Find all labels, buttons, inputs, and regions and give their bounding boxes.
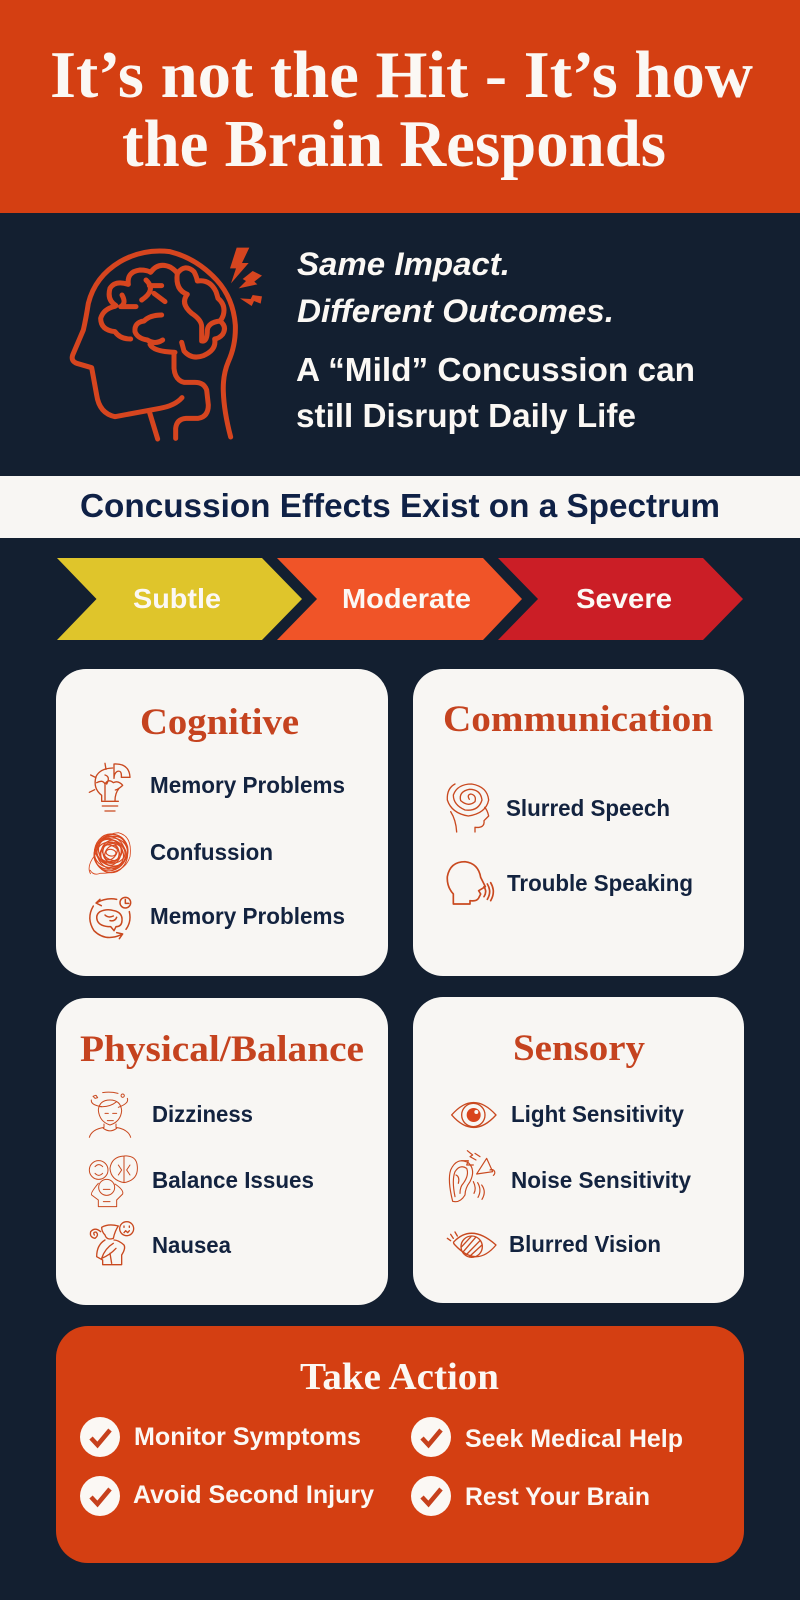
icon: brain with cycle arrows and clock [90, 897, 131, 939]
tagline line 2: Different Outcomes. [297, 293, 614, 329]
panel: communication [413, 669, 744, 976]
action: rest your brain [411, 1476, 650, 1516]
action: avoid second injury: Avoid Second Injury [133, 1481, 374, 1509]
spectrum arrow: moderate [277, 558, 522, 640]
action: rest your brain: Rest Your Brain [465, 1483, 650, 1511]
item: blurred vision: Blurred Vision [509, 1231, 661, 1257]
icon: speaking head with sound waves [447, 862, 493, 904]
spectrum arrow: subtle [57, 558, 302, 640]
panel: physical and balance [56, 998, 388, 1305]
icon: spinning head and brain [89, 1156, 137, 1207]
action: monitor symptoms: Monitor Symptoms [134, 1423, 361, 1451]
icon: head with spiral [447, 784, 489, 832]
title line 2: the Brain Responds [122, 107, 666, 181]
icon: nauseous person [90, 1222, 134, 1265]
panel: sensory [413, 997, 744, 1303]
physical balance heading: Physical/Balance [80, 1029, 364, 1070]
action: seek medical help [411, 1417, 683, 1457]
item: light sensitivity: Light Sensitivity [511, 1101, 684, 1127]
item: nausea: Nausea [152, 1232, 232, 1258]
item: dizziness: Dizziness [152, 1101, 253, 1127]
action: avoid second injury [80, 1476, 374, 1516]
panel: cognitive [56, 669, 388, 976]
item: trouble speaking: Trouble Speaking [507, 870, 693, 896]
icon: tangled scribble [87, 829, 135, 876]
spectrum heading strip: Concussion Effects Exist on a Spectrum [80, 488, 720, 525]
intro text block [296, 246, 695, 435]
communication heading: Communication [443, 699, 713, 740]
item: noise sensitivity: Noise Sensitivity [511, 1167, 691, 1193]
spectrum heading strip [0, 476, 800, 538]
action: monitor symptoms [80, 1417, 361, 1457]
title banner [0, 0, 800, 213]
icon: dizzy person [89, 1092, 131, 1137]
action: seek medical help: Seek Medical Help [465, 1425, 683, 1453]
icon: bright eye [452, 1102, 496, 1127]
item: confussion: Confussion [150, 839, 273, 865]
panel: take action [56, 1326, 744, 1563]
take action heading: Take Action [300, 1356, 499, 1398]
statement line 1: A “Mild” Concussion can [296, 352, 695, 389]
cognitive heading: Cognitive [140, 702, 299, 743]
icon: blurred eye [447, 1232, 496, 1257]
spectrum arrow: severe [498, 558, 743, 640]
spectrum arrow: moderate: Moderate [342, 583, 471, 614]
spectrum arrow: subtle: Subtle [133, 583, 221, 614]
item: memory problems repeated: Memory Problems [150, 903, 345, 929]
title line 1: It’s not the Hit - It’s how [50, 38, 754, 112]
icon: puzzle light bulb [89, 763, 130, 811]
spectrum arrow: severe: Severe [576, 583, 672, 614]
sensory heading: Sensory [513, 1028, 646, 1069]
icon: ear with loudspeaker [449, 1151, 495, 1202]
tagline: Same Impact. [297, 246, 510, 282]
item: balance issues: Balance Issues [152, 1167, 314, 1193]
item: slurred speech: Slurred Speech [506, 795, 670, 821]
icon: head with brain and impact bolts [72, 248, 262, 439]
item: memory problems: Memory Problems [150, 772, 345, 798]
statement line 2: still Disrupt Daily Life [296, 398, 636, 435]
